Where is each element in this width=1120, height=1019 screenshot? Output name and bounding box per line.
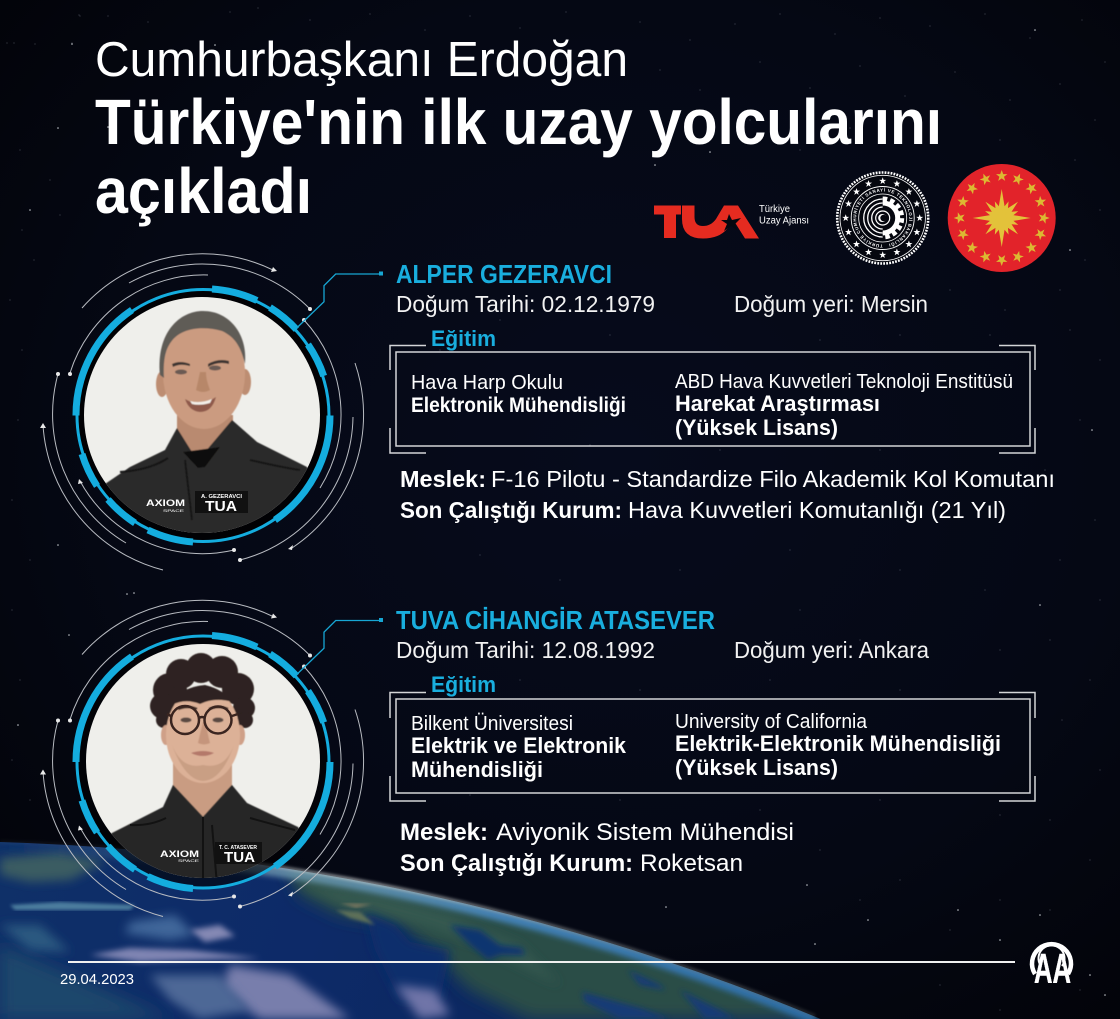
earth horizon [0,840,850,1019]
last employer: Hava Kuvvetleri Komutanlığı (21 Yıl) [628,497,1006,523]
atmosphere band [0,847,815,1019]
jacket [106,420,308,533]
photo: Alper Gezeravcı [80,295,325,540]
education heading: Eğitim [431,672,496,697]
last employer [400,850,743,877]
occupation: Meslek: [400,819,488,846]
photo: Alper Gezeravcı: AXIOM [146,498,185,508]
panel: Alper Gezeravcı portrait [40,254,383,570]
footer rule [68,961,1015,963]
education left: Hava Harp Okulu [411,372,563,394]
name badge [215,842,262,864]
thin orbit arcs [43,600,364,916]
education right: ABD Hava Kuvvetleri Teknoloji Enstitüsü [675,371,1013,393]
last employer: Roketsan [640,850,743,877]
thin orbit arcs [43,254,364,570]
hair [150,653,255,728]
panel: Alper Gezeravcı bio [390,261,1055,523]
name: ALPER GEZERAVCI [396,261,612,289]
education box: (Yüksek Lisans) [675,415,838,440]
callout connector [297,272,383,328]
title [95,33,942,227]
seal sun [973,189,1031,247]
photo: Tuva Cihangir Atasever: TUA [224,849,255,866]
blue ring [76,289,330,542]
logo: ministry seal [836,171,930,265]
education box: Elektrik ve Elektronik [411,733,626,758]
earth ocean base [0,840,825,1019]
education box: (Yüksek Lisans) [675,755,838,780]
occupation: Aviyonik Sistem Mühendisi [496,819,794,846]
last employer: Son Çalıştığı Kurum: [400,850,633,877]
education left: Bilkent Üniversitesi [411,713,573,735]
portrait backing [77,290,329,542]
education box: Elektrik-Elektronik Mühendisliği [675,731,1001,756]
education box [390,672,1035,801]
last employer [400,497,1006,523]
portrait backing [77,636,329,888]
name: TUVA CİHANGİR ATASEVER [396,607,715,635]
education heading: Eğitim [431,326,496,351]
logo: presidential seal [948,164,1056,272]
name badge [195,491,248,513]
TUA caption: Türkiye [759,204,790,215]
logo: TUA Türkiye Uzay Ajansı: Uzay Ajansı [759,216,809,226]
logo: Anadolu Agency: AA [1034,945,1071,992]
education box: Harekat Araştırması [675,391,880,416]
callout connector [297,618,383,674]
education box [390,326,1035,453]
education right: University of California [675,711,868,733]
title line 3: açıkladı [95,155,312,227]
logo: ministry seal: TÜRKİYE CUMHURİYETİ SANAYİ VE TEKNOLOJİ BAKANLIĞI [853,188,913,248]
birth place: Doğum yeri: Mersin [734,291,928,317]
photo: Tuva Cihangir Atasever: AXIOM [160,849,199,859]
glasses [167,706,238,734]
title line 1: Cumhurbaşkanı Erdoğan [95,33,628,87]
education box: Mühendisliği [411,757,543,782]
blue ring [76,636,330,888]
birth place: Doğum yeri: Ankara [734,637,929,663]
panel: Tuva Cihangir Atasever bio [390,607,1035,877]
logo: Anadolu Agency [1032,944,1071,992]
earth clouds [0,902,450,1019]
photo: Tuva Cihangir Atasever: T. C. ATASEVER [219,845,257,851]
jacket [111,784,299,878]
occupation: F-16 Pilotu - Standardize Filo Akademik Kol Komutanı [491,466,1055,492]
birth date: Doğum Tarihi: 12.08.1992 [396,637,655,663]
earth land masses [0,852,850,1019]
photo: Tuva Cihangir Atasever [80,640,325,885]
birth date: Doğum Tarihi: 02.12.1979 [396,291,655,317]
atmosphere glow [0,842,815,1016]
panel: Tuva Cihangir Atasever portrait [40,600,383,916]
photo: Tuva Cihangir Atasever: SPACE [178,858,200,863]
logo: TUA Türkiye Uzay Ajansı [654,204,809,238]
title line 2: Türkiye'nin ilk uzay yolcularını [95,86,942,158]
last employer: Son Çalıştığı Kurum: [400,497,622,523]
seal stars [954,170,1050,266]
photo: Alper Gezeravcı: SPACE [163,508,185,513]
orbit dots and arrowheads [40,614,312,908]
orbit dots and arrowheads [40,267,312,562]
date: 29.04.2023 [60,971,134,988]
photo: Alper Gezeravcı: A. GEZERAVCI [201,494,242,500]
photo: Alper Gezeravcı: TUA [205,498,237,515]
education box: Elektronik Mühendisliği [411,394,626,417]
occupation: Meslek: [400,466,486,492]
